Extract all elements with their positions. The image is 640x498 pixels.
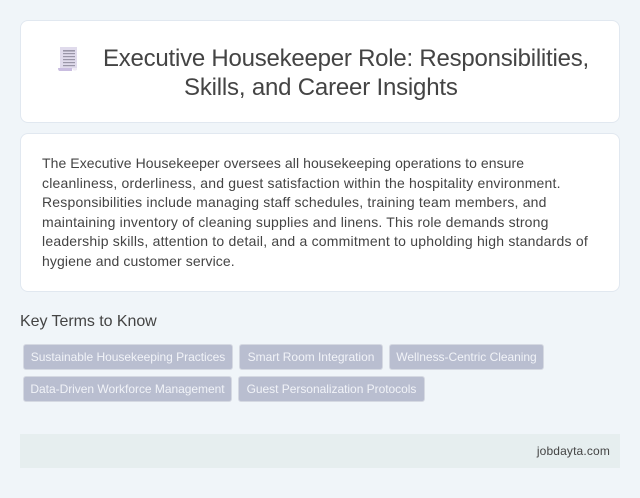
tag [23,376,232,402]
description text: Responsibilities include managing staff schedules, training team members, and [42,194,547,210]
description panel [20,133,620,292]
tag [239,344,383,370]
tag: Wellness-Centric Cleaning [396,350,537,364]
description text [42,155,588,269]
description text: hygiene and customer service. [42,253,235,269]
heading: key terms: Key Terms to Know [20,313,157,330]
tag [389,344,544,370]
header panel [20,20,620,123]
title: Skills, and Career Insights [184,74,458,101]
tag: Smart Room Integration [248,350,374,364]
tag: Data-Driven Workforce Management [30,382,225,396]
description text: leadership skills, attention to detail, and a commitment to upholding high standards of [42,233,588,249]
footer bar [20,434,620,468]
tag [23,344,233,370]
tag [238,376,425,402]
description text: cleanliness, orderliness, and guest satisfaction within the hospitality environment. [42,175,561,191]
icon: document scroll [58,47,77,71]
tag: Sustainable Housekeeping Practices [31,350,225,364]
title: Executive Housekeeper Role: Responsibilities, [103,45,589,72]
tag: Guest Personalization Protocols [247,382,416,396]
title [103,45,589,101]
tag list [23,344,544,402]
footer source text: jobdayta.com [537,444,610,458]
description text: The Executive Housekeeper oversees all housekeeping operations to ensure [42,155,524,171]
description text: maintaining inventory of cleaning supplies and linens. This role demands strong [42,214,549,230]
